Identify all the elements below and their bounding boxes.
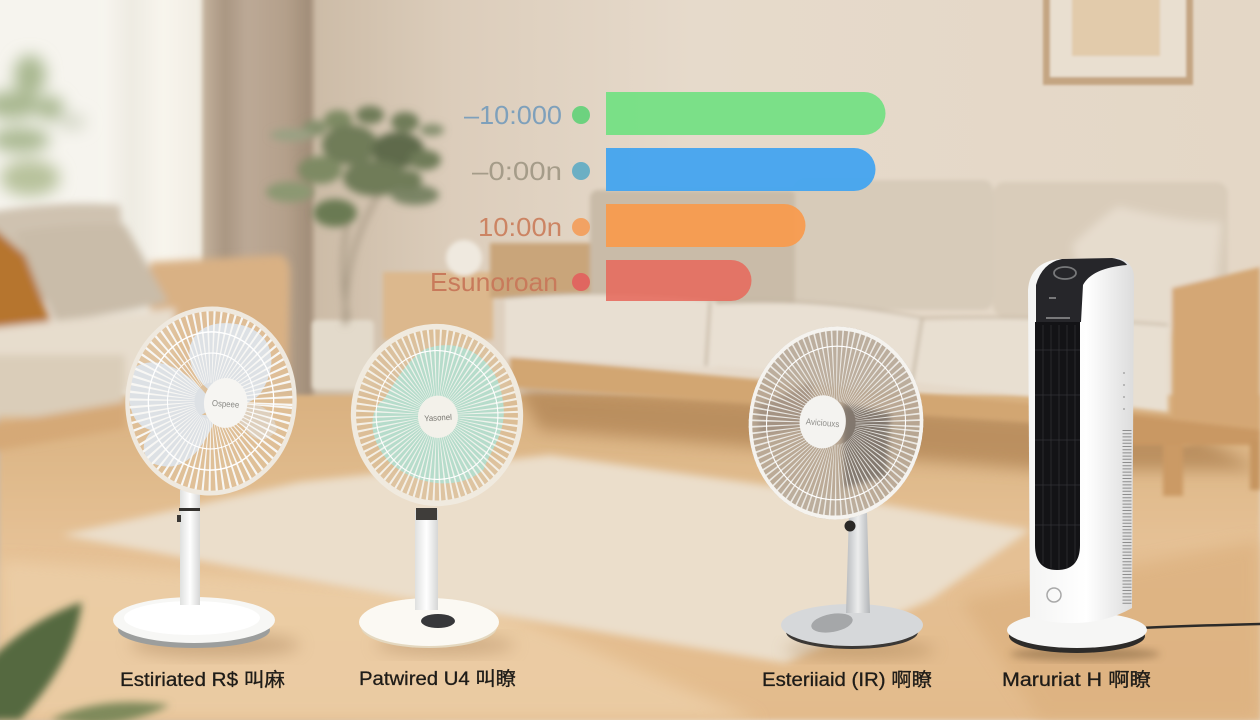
base — [781, 604, 923, 649]
hub: Aviciouxs — [805, 416, 840, 429]
hub — [797, 393, 848, 450]
black top panel — [1036, 258, 1127, 322]
grille spokes — [778, 359, 894, 487]
hub — [202, 377, 249, 429]
blades — [368, 342, 508, 487]
shadow — [785, 641, 935, 659]
shadow — [130, 633, 300, 657]
label: fan 4: Maruriat H 啊瞭 — [1002, 669, 1151, 691]
label: fan 2: Patwired U4 叫瞭 — [359, 668, 516, 690]
curtain — [203, 0, 313, 400]
blades — [124, 317, 284, 474]
base — [113, 597, 275, 648]
fan head — [741, 319, 931, 527]
wood plank streaks — [0, 540, 1260, 720]
floor — [0, 395, 1260, 720]
fan head — [347, 321, 527, 509]
potted plant — [266, 106, 444, 325]
main sofa — [383, 180, 1260, 496]
side buttons — [1123, 372, 1125, 412]
bar chart — [430, 92, 886, 301]
grille rings — [349, 322, 525, 508]
grille spokes — [384, 359, 490, 471]
fan 1 — [113, 301, 303, 657]
window plant — [0, 55, 86, 196]
left sofa — [0, 204, 290, 452]
pole — [844, 513, 870, 613]
row 1: –10:000 — [464, 100, 562, 130]
pole — [415, 508, 438, 610]
shadow — [375, 635, 515, 655]
row 3: 10:00n — [478, 212, 562, 242]
dark motor behind grille — [751, 377, 894, 492]
plant pot — [312, 320, 374, 390]
window with daylight — [0, 0, 205, 410]
shadow under sofa — [515, 385, 1260, 470]
pole — [177, 490, 200, 605]
fan head — [119, 301, 303, 501]
hub: Yasonel — [424, 413, 452, 423]
row 4: Esunoroan — [430, 267, 558, 297]
panel text — [1046, 298, 1070, 318]
hub — [417, 395, 459, 439]
base — [1007, 612, 1147, 653]
hub: Ospeee — [212, 399, 240, 410]
grille rings — [743, 321, 929, 525]
dial — [1054, 267, 1076, 279]
rug — [62, 455, 1030, 663]
grille rings — [121, 303, 301, 499]
grille — [1035, 322, 1080, 570]
row 2 — [472, 148, 875, 191]
tower body — [1028, 258, 1134, 623]
fan 3 — [741, 319, 935, 659]
base — [359, 598, 499, 648]
grille louvers — [1035, 325, 1080, 569]
row 1 — [464, 92, 886, 135]
cord — [1140, 624, 1260, 628]
label: fan 3: Esteriiaid (IR) 啊瞭 — [762, 669, 932, 691]
grille spokes — [157, 342, 265, 460]
row 3 — [478, 204, 805, 247]
shadow — [1010, 647, 1160, 661]
picture frame — [1043, 0, 1193, 85]
row 2: –0:00n — [472, 156, 562, 186]
power button — [1047, 588, 1061, 602]
fan 2 — [347, 321, 527, 655]
foreground plant — [0, 602, 170, 720]
row 4 — [430, 260, 751, 301]
side vents — [1122, 430, 1132, 606]
label: fan 1: Estiriated R$ 叫麻 — [120, 669, 285, 691]
tower fan — [1007, 258, 1260, 661]
